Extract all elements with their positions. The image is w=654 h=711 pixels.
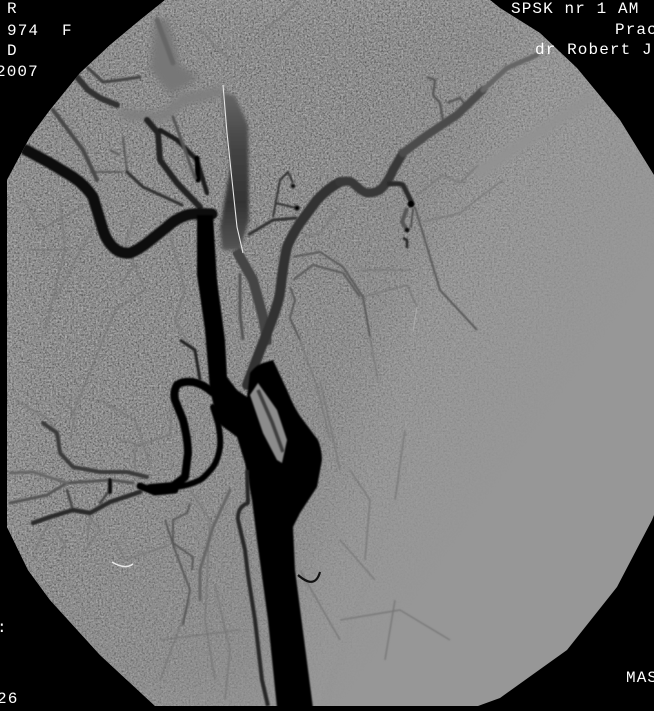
faint fine vessels xyxy=(15,0,503,700)
top right labels: dr Robert J xyxy=(535,41,653,59)
facial artery loops xyxy=(140,382,220,492)
small branch pair left of main vessel xyxy=(248,172,300,235)
large left branch xyxy=(26,150,212,253)
grey vessel to bulb xyxy=(236,250,268,345)
top left labels: D xyxy=(7,42,18,60)
top left labels: R xyxy=(7,0,18,18)
top left labels xyxy=(0,0,73,81)
main upper artery xyxy=(247,55,537,385)
blob at end of left branch xyxy=(18,155,32,192)
bright artefact xyxy=(112,562,133,567)
side branch with dot xyxy=(387,184,414,248)
bright catheter xyxy=(223,85,243,253)
upper left branches xyxy=(53,20,207,207)
small branch beside bulb xyxy=(238,470,268,706)
dark sac behind catheter xyxy=(220,92,249,250)
top left labels: 974 xyxy=(7,22,39,40)
top right labels xyxy=(511,0,654,59)
hazy background blots xyxy=(115,18,596,180)
top left labels: F xyxy=(62,22,73,40)
carotid bulb and main trunk xyxy=(197,215,322,708)
streak in slit xyxy=(258,390,283,452)
top right labels: SPSK nr 1 AM xyxy=(511,0,639,18)
mid-tone fine vessels xyxy=(90,137,477,625)
lower left branching vessels xyxy=(10,423,230,600)
bottom labels xyxy=(0,619,654,708)
upper right small branch xyxy=(427,77,465,120)
bulb inner slit xyxy=(250,383,287,463)
small branch right of trunk xyxy=(298,572,320,582)
